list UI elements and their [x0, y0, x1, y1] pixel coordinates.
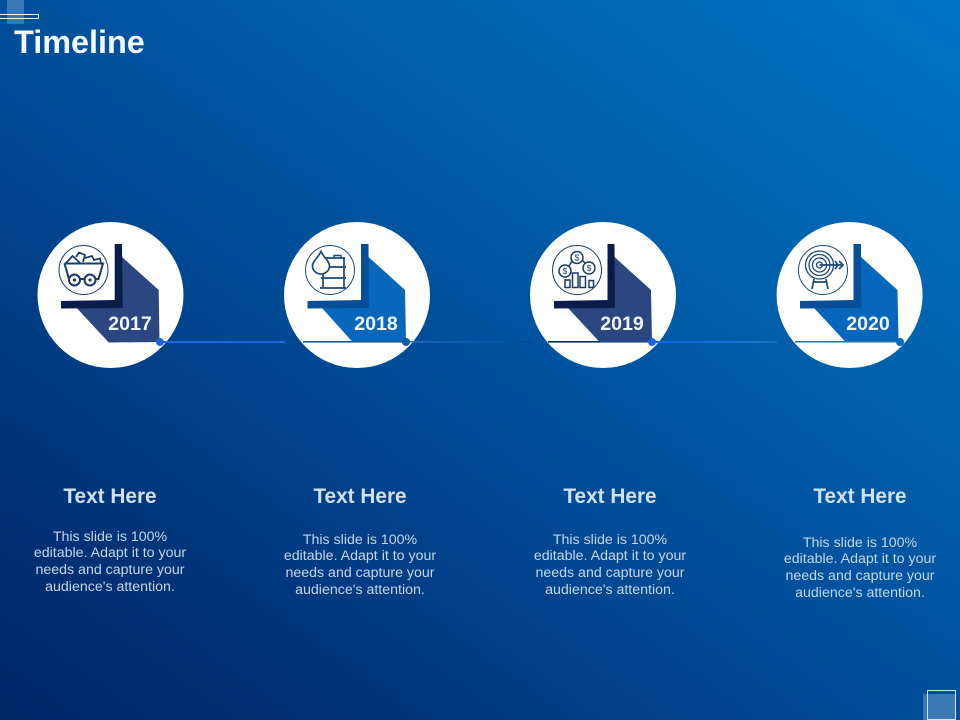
year 2018: 2018 — [354, 313, 398, 335]
body: This slide is 100% — [553, 532, 667, 548]
body: audience's attention. — [45, 579, 175, 595]
column 2017 text — [34, 485, 186, 595]
year 2020: 2020 — [846, 313, 890, 335]
corner bracket 2019 — [554, 244, 615, 308]
heading: Text Here — [313, 485, 407, 508]
body — [284, 532, 436, 598]
body: needs and capture your — [785, 568, 935, 584]
icon: money chart 2019 — [552, 246, 602, 294]
circle 2019 — [530, 222, 676, 368]
dot 2019 — [648, 338, 656, 346]
heading: Text Here — [63, 485, 157, 508]
column 2020 text — [784, 485, 936, 601]
body — [34, 528, 186, 595]
column 2019 text — [534, 485, 686, 598]
icon: money chart 2019: $ — [587, 263, 592, 273]
ribbon shadow 2017 — [77, 257, 160, 342]
icon: money chart 2019: $ — [575, 252, 580, 262]
icon: money chart 2019: $ — [563, 266, 568, 276]
decorative corner: bottom right — [923, 690, 956, 720]
corner bracket 2020 — [800, 244, 862, 308]
body: audience's attention. — [545, 582, 675, 598]
year 2017: 2017 — [108, 313, 152, 335]
body: This slide is 100% — [53, 528, 167, 544]
heading: Text Here — [563, 485, 657, 508]
circle 2020 — [777, 222, 923, 368]
circle 2018 — [284, 222, 430, 368]
body: editable. Adapt it to your — [784, 551, 936, 567]
timeline line — [156, 338, 904, 346]
column 2018 text — [284, 485, 436, 598]
body: editable. Adapt it to your — [284, 548, 436, 564]
body: This slide is 100% — [303, 532, 417, 548]
dot 2020 — [896, 338, 904, 346]
body — [784, 534, 936, 601]
ribbon 2018 — [322, 257, 406, 342]
body: needs and capture your — [35, 562, 185, 578]
ribbon 2020 — [814, 257, 898, 342]
body: audience's attention. — [795, 585, 925, 601]
body: needs and capture your — [285, 565, 435, 581]
body — [534, 532, 686, 598]
circle 2017 — [38, 222, 184, 368]
icon: mine cart 2017 — [59, 246, 108, 294]
body: This slide is 100% — [803, 534, 917, 550]
decorative corner: top left — [0, 0, 39, 24]
ribbon 2019 — [568, 257, 652, 342]
body: editable. Adapt it to your — [34, 545, 186, 561]
corner bracket 2017 — [61, 244, 123, 308]
dot 2017 — [156, 338, 164, 346]
corner bracket 2018 — [308, 244, 369, 308]
body: needs and capture your — [535, 565, 685, 581]
year 2019: 2019 — [600, 313, 644, 335]
icon: target 2020 — [798, 246, 848, 294]
body: editable. Adapt it to your — [534, 548, 686, 564]
heading: Text Here — [813, 485, 907, 508]
icon: oil barrel 2018 — [306, 246, 354, 294]
dot 2018 — [402, 338, 410, 346]
body: audience's attention. — [295, 582, 425, 598]
title: Timeline — [14, 24, 145, 60]
